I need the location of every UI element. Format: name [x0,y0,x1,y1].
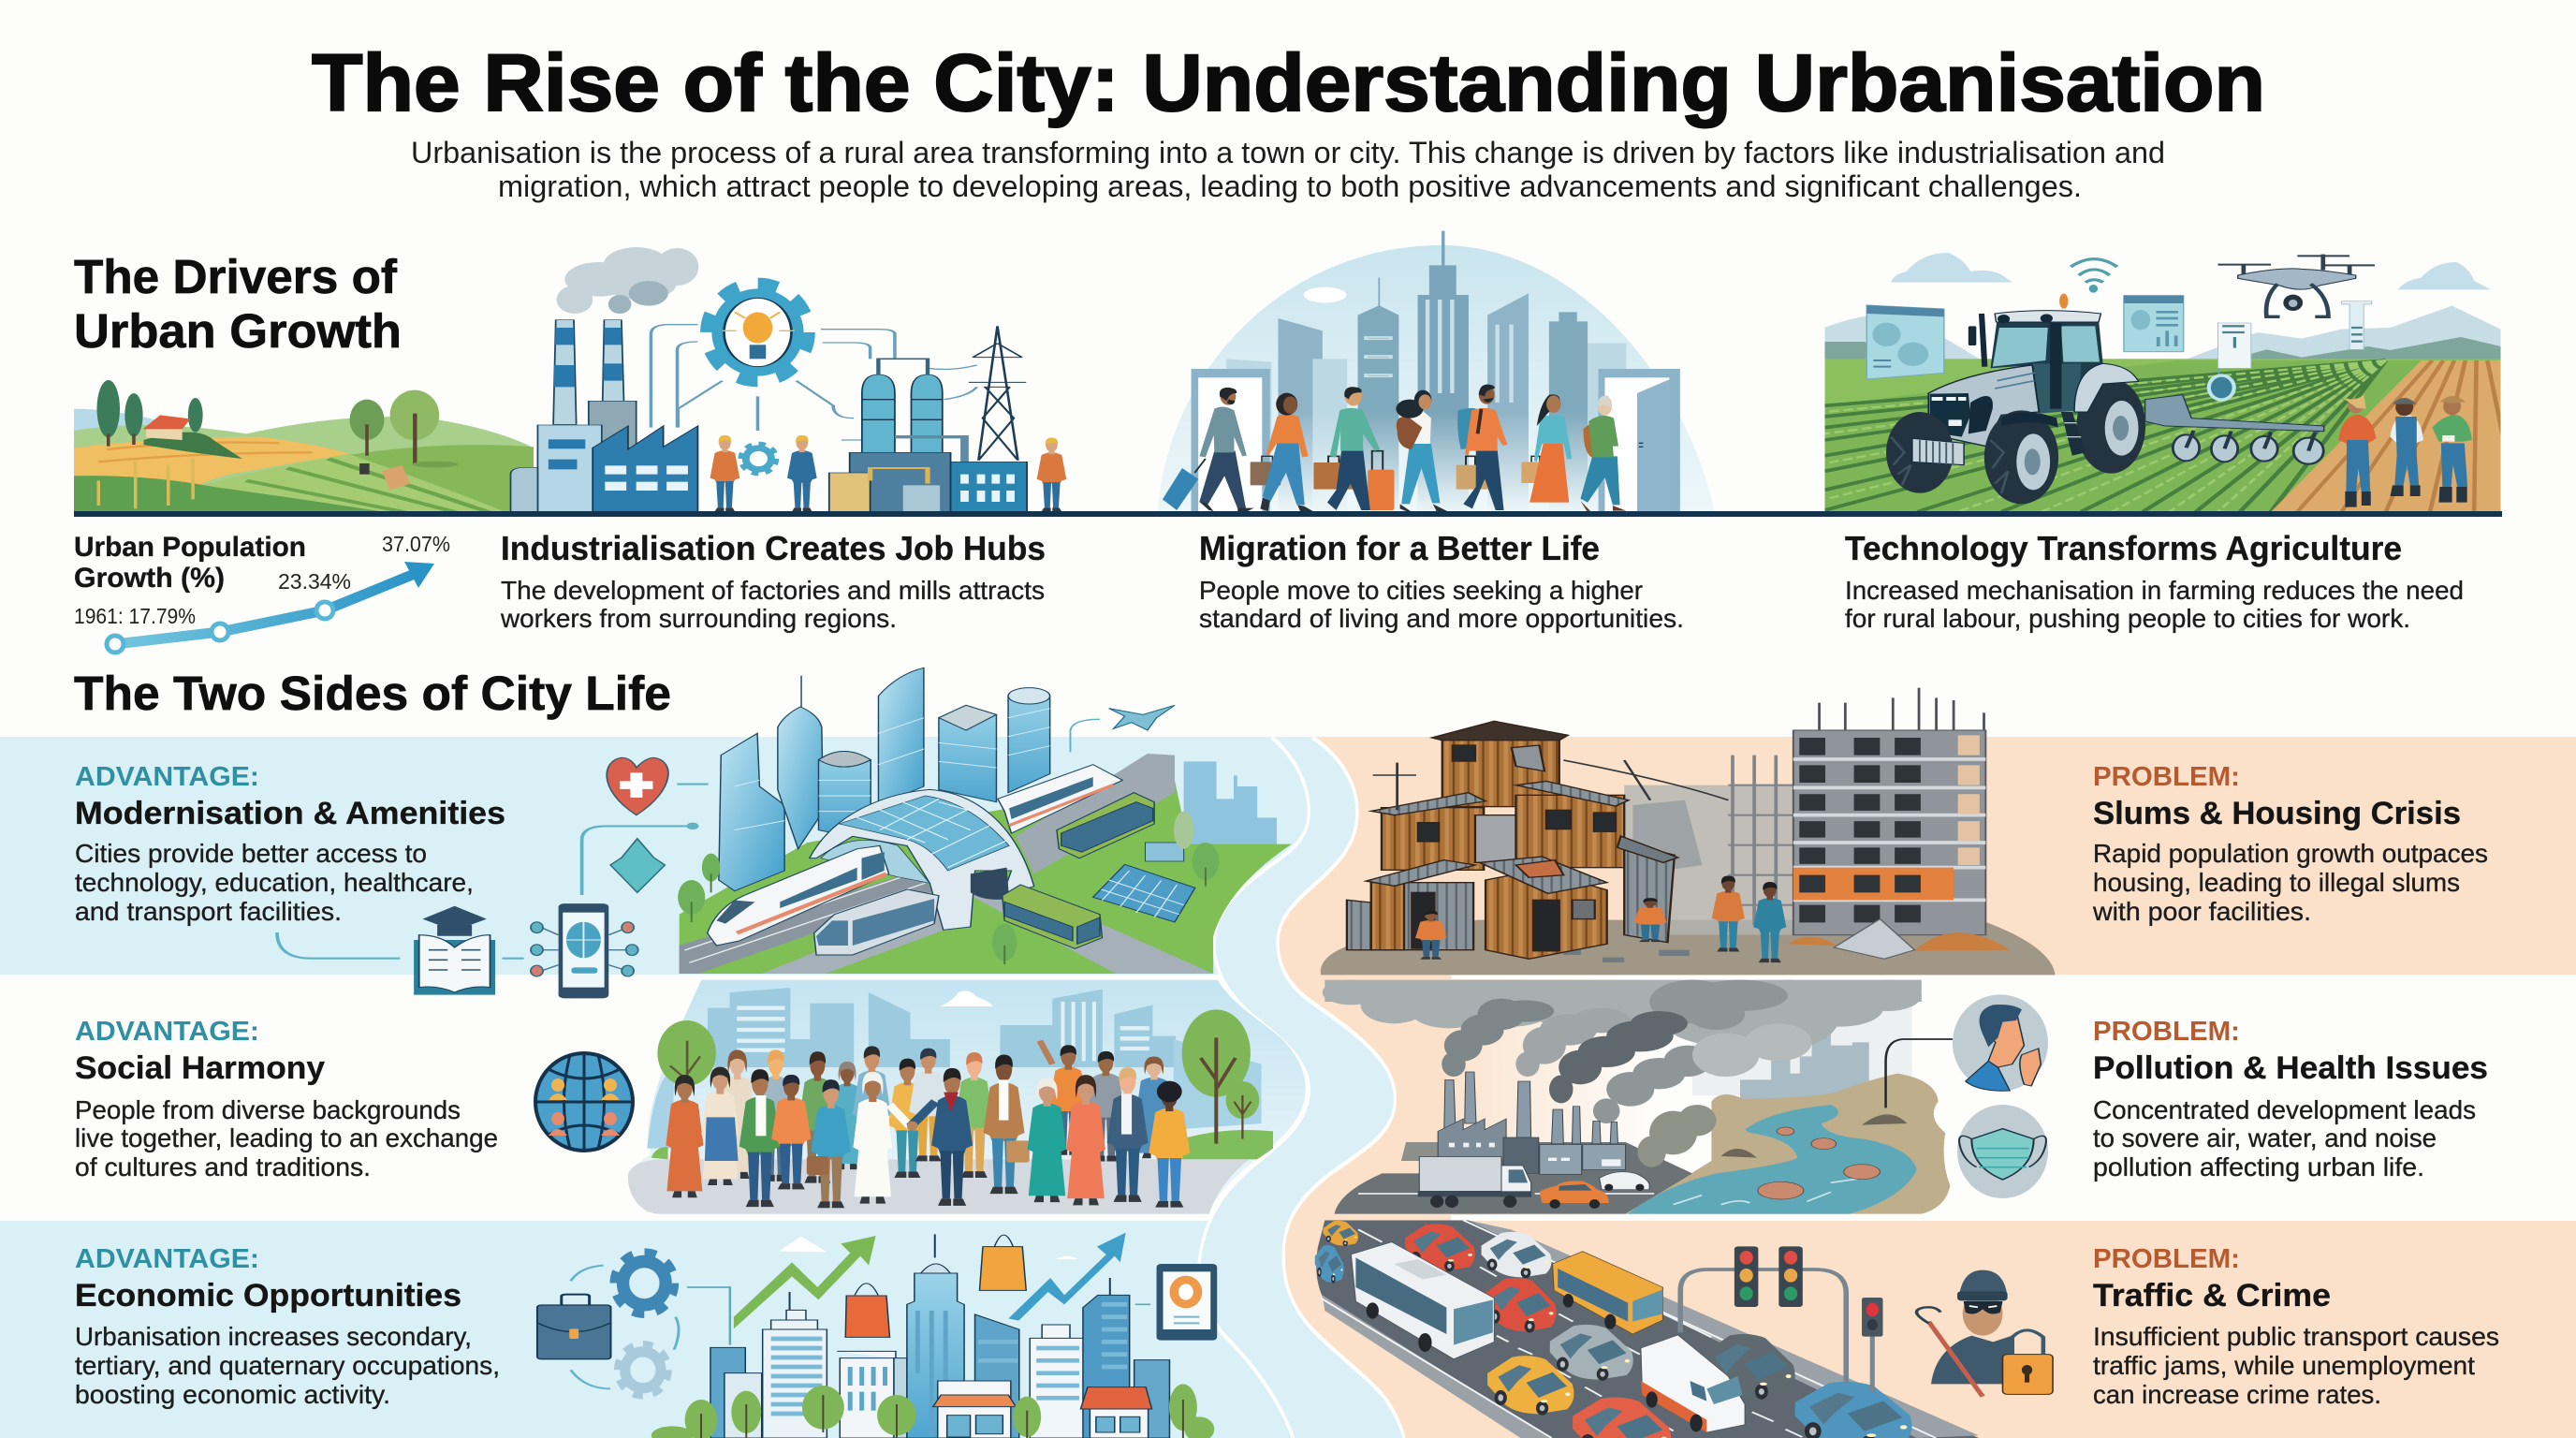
front weights [1912,438,1964,465]
migrant in orange skirt [1521,394,1572,503]
text: advantage economic opportunities: boosting economic activity. [75,1380,390,1409]
tablet [1157,1264,1217,1341]
tractor [1886,294,2145,504]
text: problem slums [2092,762,2488,926]
text: industrialisation: The development of factories and mills attracts [501,576,1045,605]
text: problem pollution [2093,1017,2488,1181]
drone [2217,255,2375,316]
tanks [862,374,943,452]
grass and ground [651,1130,1273,1159]
illustration: migration to the city [1158,231,1715,513]
text: advantage economic opportunities: Economic Opportunities [75,1278,461,1313]
white bus [1351,1242,1494,1359]
rear fender [2074,363,2139,412]
chimney plumes [1442,999,1554,1077]
ground line [74,511,2502,517]
coach [814,889,939,955]
trees [657,1020,716,1086]
wifi [2071,259,2117,283]
roads [680,873,939,974]
gears [614,1253,675,1314]
text: advantage economic opportunities: tertiary, and quaternary occupations, [75,1351,500,1380]
cars [1540,1172,1649,1209]
front tyre [1984,410,2058,504]
text: advantage social harmony [75,1017,498,1181]
lower train [708,845,889,946]
heading: drivers of urban growth: The Drivers of [74,250,398,303]
road [1316,1220,1979,1438]
peach fade behind pollution scene [1432,979,1657,1215]
text: advantage modernisation: technology, education, healthcare, [75,868,474,897]
illustration: industry and job hub [510,247,1066,512]
text: problem traffic and crime: can increase crime rates. [2093,1380,2381,1409]
pylon [969,326,1026,461]
workers [710,435,739,511]
intro paragraph: Urbanisation is the process of a rural area transforming into a town or city. This change is driven by factors like industrialisation and [411,136,2165,169]
data panels [1866,296,2372,402]
sky panel [628,980,1306,1214]
text: problem traffic and crime: PROBLEM: [2093,1244,2240,1274]
polluted river [1628,1105,1917,1214]
migrant with backpack [1396,390,1447,512]
migrant with brown bag [1251,393,1313,512]
ground [680,780,1292,974]
rubble and sand [1834,919,1914,959]
band: advantage row one [0,737,1329,975]
icon: healthcare heart [607,757,668,815]
distant skyline [1184,761,1277,845]
text: migration: Migration for a Better Life [1199,529,1600,567]
front row of people [666,1055,1190,1208]
concrete tower [1793,688,1985,935]
text: problem traffic and crime [2093,1244,2499,1409]
icon: face mask [1957,1105,2048,1198]
data labels: 37.07% [382,532,450,556]
back row of people [719,1041,1172,1183]
text: problem pollution: to sovere air, water, and noise [2093,1123,2437,1152]
cultivator implement [2145,395,2324,464]
text: advantage modernisation: Modernisation & Amenities [75,796,505,831]
hood [1928,365,2039,447]
text: technology: Technology Transforms Agriculture [1845,529,2402,567]
power pole and wires [1373,760,1728,810]
text: advantage social harmony: Social Harmony [75,1050,325,1086]
dome skyline backdrop [1158,245,1715,513]
skyline fade near ground [1268,412,1624,513]
steps [2061,412,2086,456]
icon: education book [414,906,495,995]
data points [107,602,333,653]
rear tyre [2076,378,2145,474]
migrant with tan bag [1456,385,1507,510]
smoke cloud [1323,980,1922,1049]
text: advantage social harmony: People from diverse backgrounds [75,1095,461,1124]
background buildings [708,988,1176,1067]
text: problem pollution: PROBLEM: [2093,1017,2240,1047]
text: advantage economic opportunities [75,1244,500,1409]
land [1626,1074,1950,1214]
text: problem pollution: Concentrated development leads [2093,1095,2476,1124]
chimneys [553,320,577,424]
illustration: traffic jam and crime [1315,1220,2053,1438]
icon: teal diamond [610,839,665,892]
text: advantage modernisation: ADVANTAGE: [75,762,259,792]
orange bus [1553,1252,1662,1334]
small front tyre [1886,412,1954,493]
background haze building [1624,785,1793,935]
growth line [115,571,421,644]
text: problem pollution: pollution affecting urban life. [2093,1152,2424,1181]
illustration: air and water pollution [1323,980,2048,1214]
smoke [557,247,698,314]
text: advantage social harmony: live together, leading to an exchange [75,1123,498,1152]
plane icon [1109,705,1175,730]
illustration: economic opportunities [537,1233,1217,1438]
green growth arrow [734,1236,876,1328]
main title: The Rise of the City: Understanding Urbanisation [312,38,2265,128]
text: technology [1845,529,2464,633]
text: migration: People move to cities seeking a higher [1199,576,1643,605]
city buildings [710,1264,1169,1438]
chart heading: Urban Population [74,532,306,563]
band: problem row one [1310,737,2576,975]
text: migration [1199,529,1684,633]
text: advantage social harmony: ADVANTAGE: [75,1017,259,1047]
icon: thief with padlock [1917,1270,2053,1397]
chart: urban population growth [74,532,450,653]
clouds [1891,253,2491,289]
band: problem row three [1310,1221,2576,1438]
solar panels [1093,864,1195,922]
traffic lights [1680,1246,1882,1392]
chart heading: Growth (%) [74,563,225,594]
truck [1418,1157,1531,1208]
text: advantage social harmony: of cultures and traditions. [75,1152,371,1181]
band: advantage row three [0,1221,1329,1438]
icon: globe with people [535,1053,633,1151]
text: problem traffic and crime: traffic jams, while unemployment [2093,1351,2475,1380]
heading: drivers of urban growth: Urban Growth [74,304,402,358]
illustration: modern city transport hub [678,668,1292,974]
cab [1990,320,2103,412]
illustration: rural landscape [74,380,534,513]
upper green bus [1057,793,1154,858]
text: problem slums: PROBLEM: [2093,762,2240,792]
text: industrialisation [500,529,1046,633]
shops [933,1381,1152,1438]
pollution callout line [1886,1039,1953,1108]
text: problem slums: Slums & Housing Crisis [2093,796,2461,831]
intro paragraph: migration, which attract people to developing areas, leading to both positive advancements and significant challenges. [498,169,2082,203]
trees [651,1384,1214,1438]
connector arrows [651,325,977,440]
amenity icons [277,757,709,998]
exit door [1599,369,1680,512]
text: industrialisation: workers from surrounding regions. [500,604,897,633]
hub gear with lightbulb [707,285,808,380]
ground [1321,920,2055,975]
text: problem slums: Rapid population growth outpaces [2093,839,2488,868]
mountains [1825,305,2501,360]
data labels [74,532,450,628]
briefcase icon [537,1295,611,1359]
icon: smartphone [531,903,638,998]
text: problem slums: housing, leading to illegal slums [2093,868,2460,897]
heading: two sides of city life: The Two Sides of City Life [74,667,671,720]
trees [678,812,1219,961]
hazy sky [1692,1005,1912,1095]
text: advantage modernisation [75,762,505,926]
migrant with blue suitcase [1163,388,1253,512]
fish [1758,1127,1880,1199]
text: advantage economic opportunities: Urbanisation increases secondary, [75,1322,472,1351]
lower green bus [1003,885,1102,948]
cars [1324,1221,1358,1246]
text: problem slums: with poor facilities. [2092,897,2311,926]
text: technology: for rural labour, pushing people to cities for work. [1845,604,2410,633]
text: problem pollution: Pollution & Health Issues [2093,1050,2488,1086]
upper train [998,765,1122,833]
shopping bags [845,1296,889,1337]
text: problem traffic and crime: Insufficient public transport causes [2093,1322,2499,1351]
data labels: 23.34% [278,569,351,594]
icon: coughing person [1953,994,2048,1092]
illustration: mechanised farm [1824,253,2518,512]
chart heading [74,532,306,594]
entry doorway [1192,369,1270,512]
fields [1825,359,2501,404]
white van [1641,1335,1745,1432]
shanty huts [1347,721,1678,959]
text: industrialisation: Industrialisation Creates Job Hubs [501,529,1046,567]
farmers [2338,395,2472,507]
data labels: 1961: 17.79% [74,604,196,628]
chimneys and factory [1438,1072,1626,1174]
migrant in green jacket [1580,396,1626,511]
blue growth arrow [1008,1233,1126,1321]
station arch [810,789,1034,930]
illustration: slums and unfinished tower [1321,688,2055,975]
text: problem traffic and crime: Traffic & Crime [2093,1278,2331,1313]
residents [1633,898,1667,942]
text: advantage modernisation: Cities provide better access to [75,839,427,868]
illustration: diverse crowd in a park [628,980,1306,1214]
distant city [1740,1023,1902,1098]
text: advantage modernisation: and transport facilities. [75,897,342,926]
skyscrapers [719,668,1050,891]
heading: drivers of urban growth [74,250,402,358]
migrant with case and orange suitcase [1313,387,1394,510]
text: migration: standard of living and more opportunities. [1199,604,1684,633]
text: advantage economic opportunities: ADVANTAGE: [75,1244,259,1274]
river divider between advantages and problems [1199,737,1451,1438]
intro paragraph [411,136,2165,203]
text: technology: Increased mechanisation in farming reduces the need [1845,576,2464,605]
